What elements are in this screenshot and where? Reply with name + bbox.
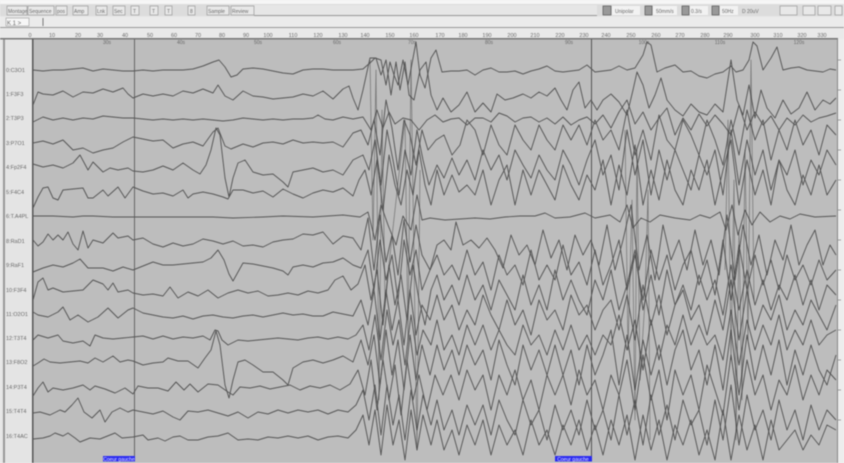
- toolbar: Amp: [74, 9, 84, 15]
- burst overlays: [370, 60, 420, 450]
- channel label column: 9:RaF1: [6, 263, 24, 269]
- epoch markers: 110s: [715, 40, 726, 46]
- channel label column: 10:F3F4: [6, 288, 26, 294]
- channel label column: 15:T4T4: [6, 409, 26, 415]
- right toolbar controls: 0.3/s: [691, 9, 702, 15]
- time ruler: 290: [723, 33, 733, 39]
- channel label column: 8:RaD1: [6, 239, 25, 245]
- channel 10: [33, 280, 836, 345]
- right toolbar controls: [603, 6, 842, 15]
- epoch markers: 50s: [254, 40, 263, 46]
- epoch markers: 60s: [333, 40, 342, 46]
- time ruler: 210: [530, 33, 540, 39]
- channel 2: [33, 100, 836, 135]
- time ruler: 280: [700, 33, 710, 39]
- event tag: left: Coeur gauche: [103, 457, 135, 463]
- channel label column: [3, 39, 32, 463]
- channel label column: 3:P7O1: [6, 141, 25, 147]
- right toolbar controls: Unipolar: [615, 9, 634, 15]
- toolbar: Sec: [114, 9, 123, 15]
- channel label column: 2:T3P3: [6, 116, 24, 122]
- time ruler: 60: [171, 33, 177, 39]
- channel 4: [33, 128, 836, 197]
- channel 14: [33, 385, 836, 445]
- time ruler: 230: [579, 33, 589, 39]
- right scroll strip: [838, 39, 844, 463]
- time ruler: 200: [507, 33, 517, 39]
- secondary toolbar: [0, 17, 844, 27]
- channel 11: [33, 310, 836, 370]
- time ruler: 220: [555, 33, 565, 39]
- time ruler: 330: [817, 33, 827, 39]
- channel 12: [33, 330, 836, 398]
- toolbar: 8: [190, 9, 193, 15]
- toolbar: T: [152, 9, 155, 15]
- time ruler: 190: [482, 33, 492, 39]
- channel label column: 14:P3T4: [6, 385, 27, 391]
- time ruler: 260: [651, 33, 661, 39]
- time ruler: 170: [435, 33, 445, 39]
- channel label column: 16:T4AC: [6, 434, 28, 440]
- right toolbar controls: 50Hz: [722, 9, 734, 15]
- time ruler: [0, 28, 844, 39]
- secondary toolbar: K 1 >: [7, 21, 22, 27]
- channel 15: [33, 405, 836, 460]
- time ruler: 80: [219, 33, 225, 39]
- toolbar: Lnk: [97, 9, 106, 15]
- time ruler: 30: [97, 33, 103, 39]
- channel label column: 11:O2O1: [6, 312, 28, 318]
- channel 1: [33, 58, 836, 118]
- epoch markers: 90s: [565, 40, 574, 46]
- channel 13: [33, 355, 836, 420]
- channel 5: [33, 140, 836, 210]
- time ruler: 320: [797, 33, 807, 39]
- time ruler: 90: [243, 33, 249, 39]
- time ruler: 240: [601, 33, 611, 39]
- time ruler: 300: [750, 33, 760, 39]
- channel label column: 12:T3T4: [6, 336, 26, 342]
- event tag: right: Coeur gauche: [557, 457, 589, 463]
- channel 7: [33, 205, 836, 280]
- time ruler: 0: [28, 33, 32, 39]
- epoch markers: 40s: [177, 40, 186, 46]
- toolbar: Review: [232, 9, 249, 15]
- toolbar: Sample: [208, 9, 225, 15]
- time ruler: 120: [313, 33, 323, 39]
- time ruler: 130: [338, 33, 348, 39]
- channel label column: 13:F8O2: [6, 360, 27, 366]
- channel label column: 1:F3F3: [6, 92, 23, 98]
- epoch markers: [103, 40, 805, 46]
- channel label column: 6:T.A4PL: [6, 214, 28, 220]
- time ruler: 150: [385, 33, 395, 39]
- right toolbar controls: D 20uV: [742, 9, 759, 15]
- toolbar: [0, 4, 844, 16]
- time ruler: 100: [263, 33, 273, 39]
- time ruler: 180: [458, 33, 468, 39]
- channel 3: [33, 100, 836, 170]
- channel 8: [33, 240, 836, 300]
- toolbar: T: [133, 9, 136, 15]
- time ruler: 140: [360, 33, 370, 39]
- epoch markers: 70s: [408, 40, 417, 46]
- toolbar: pos: [57, 9, 66, 15]
- toolbar: T: [167, 9, 170, 15]
- time ruler: 110: [289, 33, 297, 39]
- epoch markers: 80s: [485, 40, 494, 46]
- epoch markers: 120s: [794, 40, 805, 46]
- right toolbar controls: 50mm/s: [656, 9, 674, 15]
- epoch markers: 100s: [639, 40, 650, 46]
- time ruler: 310: [773, 33, 783, 39]
- toolbar: Montage: [8, 9, 28, 15]
- channel label column: 5:F4C4: [6, 190, 24, 196]
- time ruler: 250: [626, 33, 636, 39]
- channel 6: [33, 195, 836, 245]
- time ruler: 40: [122, 33, 128, 39]
- channel label column: 4:Fp2F4: [6, 165, 26, 171]
- epoch markers: 30s: [103, 40, 112, 46]
- time ruler: 270: [675, 33, 685, 39]
- time ruler: 10: [49, 33, 55, 39]
- time ruler: 20: [75, 33, 81, 39]
- time ruler: 50: [147, 33, 153, 39]
- channel label column: 0:C3O1: [6, 68, 25, 74]
- toolbar: Sequence: [29, 9, 52, 15]
- channel 9: [33, 250, 836, 325]
- time ruler: 160: [409, 33, 419, 39]
- channel 0: [33, 42, 836, 88]
- time ruler: 70: [195, 33, 201, 39]
